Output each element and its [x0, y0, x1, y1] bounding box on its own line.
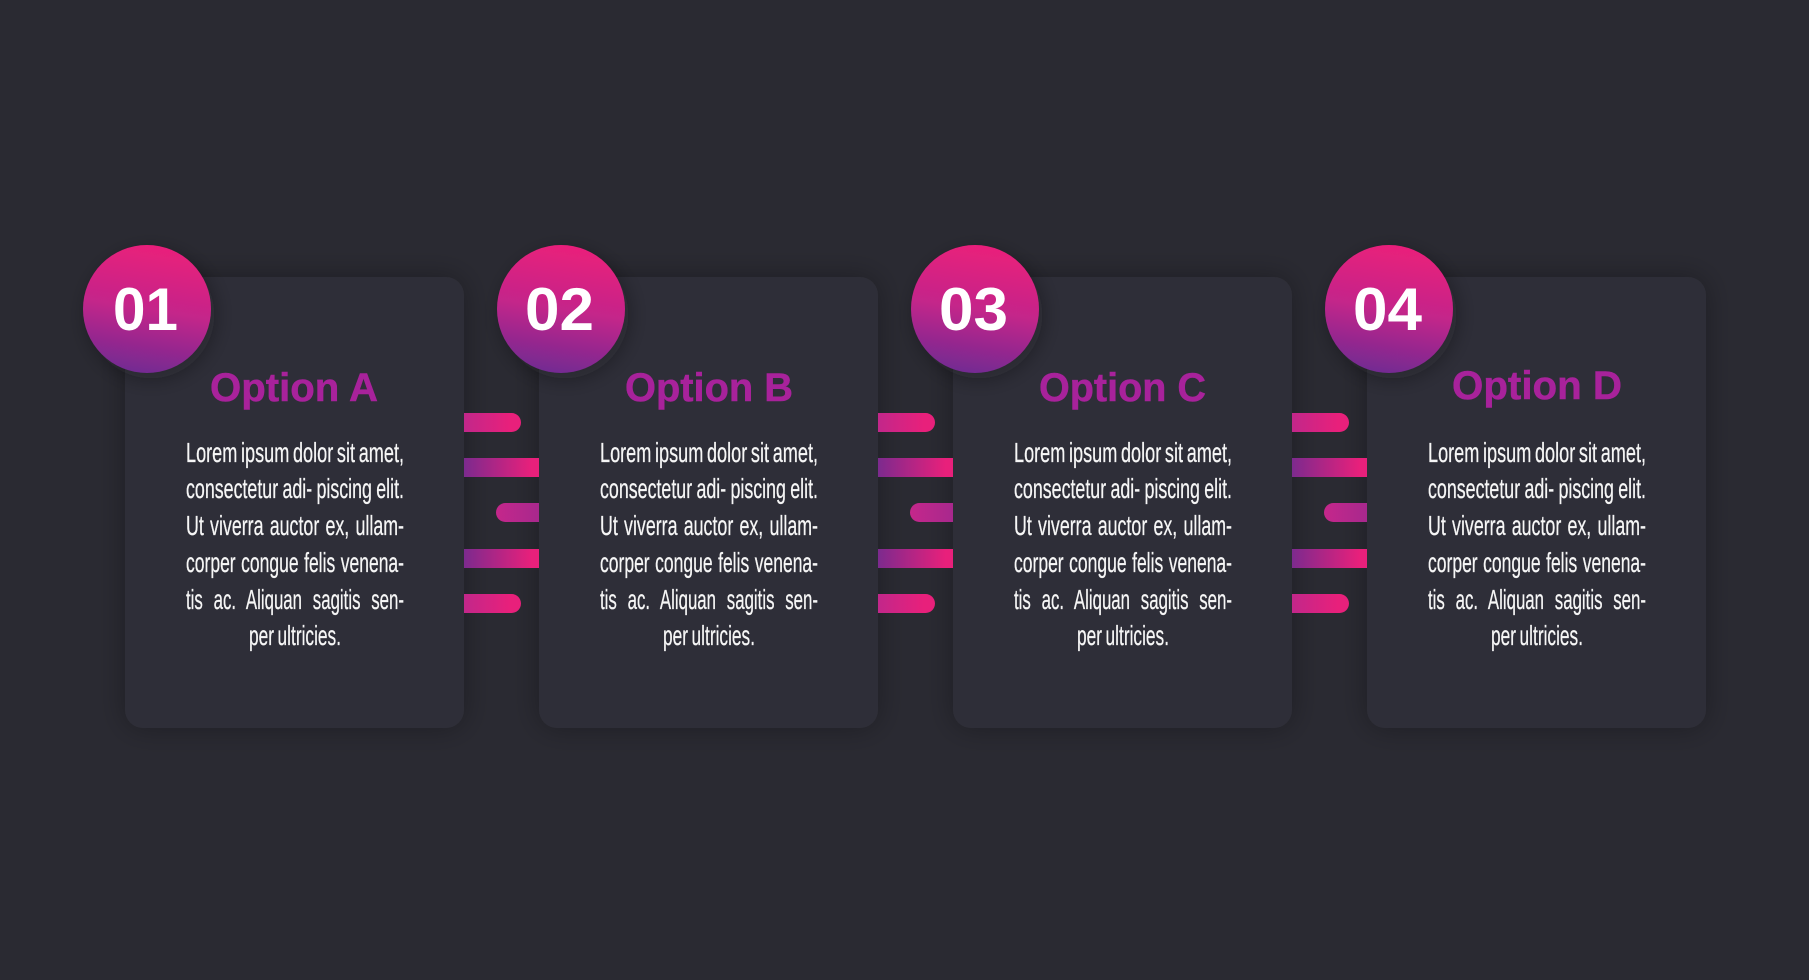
badge 02 — [497, 245, 625, 373]
text block: card D body: tis ac. Aliquan sagitis sen- — [1428, 584, 1646, 615]
text block: card D body: consectetur adi- piscing elit. — [1428, 473, 1646, 504]
heading: Option B: Option B — [625, 366, 793, 410]
heading: Option D: Option D — [1452, 364, 1622, 408]
text block: card B body: corper congue felis venena- — [600, 547, 818, 578]
panel: card B background — [539, 277, 878, 728]
text block: card A body: Lorem ipsum dolor sit amet, — [186, 437, 404, 468]
badge 02: 02 — [525, 276, 594, 343]
text block: card A body: consectetur adi- piscing elit. — [186, 473, 404, 504]
text block: card C body: tis ac. Aliquan sagitis sen- — [1014, 584, 1232, 615]
panel: card C background — [953, 277, 1292, 728]
text block: card D body: Ut viverra auctor ex, ullam- — [1428, 510, 1646, 541]
text block: card A body — [186, 437, 404, 651]
text block: card C body: consectetur adi- piscing elit. — [1014, 473, 1232, 504]
badge 01 — [83, 245, 211, 373]
text block: card C body: corper congue felis venena- — [1014, 547, 1232, 578]
text block: card B body — [600, 437, 818, 651]
text block: card D body: per ultricies. — [1491, 620, 1583, 651]
badge 03: 03 — [939, 276, 1008, 343]
text block: card C body: Lorem ipsum dolor sit amet, — [1014, 437, 1232, 468]
text block: card B body: tis ac. Aliquan sagitis sen- — [600, 584, 818, 615]
text block: card B body: consectetur adi- piscing elit. — [600, 473, 818, 504]
text block: card A body: corper congue felis venena- — [186, 547, 404, 578]
badge 04 — [1325, 245, 1453, 373]
text block: card D body: corper congue felis venena- — [1428, 547, 1646, 578]
text block: card C body: Ut viverra auctor ex, ullam- — [1014, 510, 1232, 541]
text block: card B body: Lorem ipsum dolor sit amet, — [600, 437, 818, 468]
connector bars A to B — [464, 413, 539, 613]
text block: card D body — [1428, 437, 1646, 651]
text block: card D body: Lorem ipsum dolor sit amet, — [1428, 437, 1646, 468]
badge 03 — [911, 245, 1039, 373]
text block: card B body: Ut viverra auctor ex, ullam- — [600, 510, 818, 541]
text block: card A body: Ut viverra auctor ex, ullam- — [186, 510, 404, 541]
connector bars B to C — [878, 413, 953, 613]
panel: card D background — [1367, 277, 1706, 728]
heading: Option A: Option A — [210, 366, 378, 410]
text block: card C body: per ultricies. — [1077, 620, 1169, 651]
text block: card B body: per ultricies. — [663, 620, 755, 651]
heading: Option C: Option C — [1039, 366, 1206, 410]
text block: card A body: per ultricies. — [249, 620, 341, 651]
badge 01: 01 — [113, 276, 178, 343]
badge 04: 04 — [1353, 276, 1423, 343]
text block: card C body — [1014, 437, 1232, 651]
text block: card A body: tis ac. Aliquan sagitis sen- — [186, 584, 404, 615]
connector bars C to D — [1292, 413, 1367, 613]
panel: card A background — [125, 277, 464, 728]
